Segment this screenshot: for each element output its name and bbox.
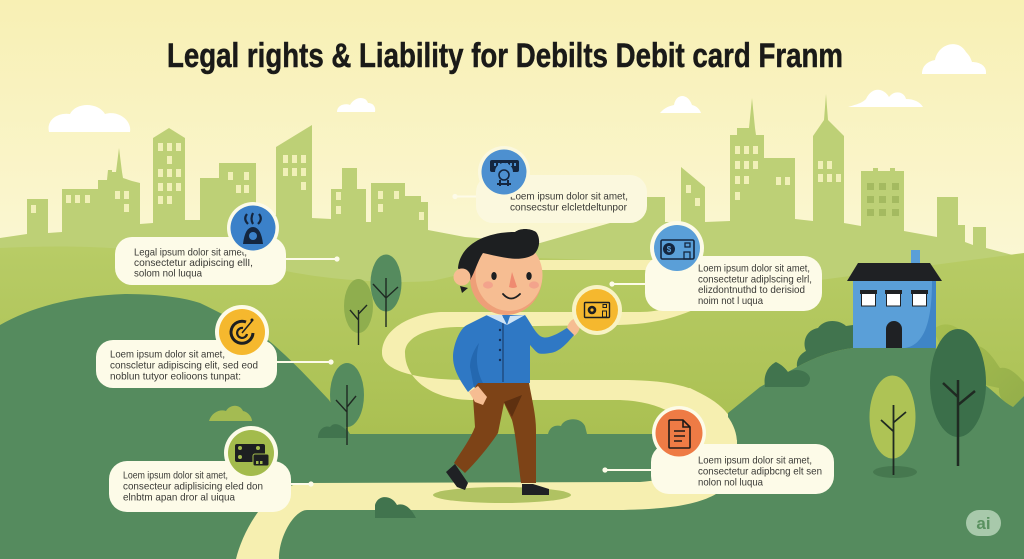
callout: keypad: Loem ipsum dolor sit amet, xyxy=(510,192,628,202)
cheeks xyxy=(483,281,539,289)
ground shadow xyxy=(433,487,571,503)
bush behind walker xyxy=(548,419,587,434)
ai watermark badge xyxy=(966,510,1001,536)
callout: legal ipsum: consectetur adipiscing ellI, xyxy=(134,258,253,269)
walking man xyxy=(433,229,580,503)
right hand xyxy=(567,319,580,336)
icon: banknote: $ xyxy=(667,245,672,254)
callout: banknote: consectetur adiplscing elrl, xyxy=(698,274,812,286)
left trees xyxy=(344,254,402,345)
nose xyxy=(509,272,517,288)
callout: target xyxy=(96,305,334,388)
collar xyxy=(486,315,525,325)
callout: document: consectetur adipbcng elt sen xyxy=(698,466,822,478)
tree: olive xyxy=(344,279,373,345)
ai watermark badge: ai xyxy=(976,514,991,533)
hair xyxy=(458,229,539,280)
callout: document xyxy=(602,406,834,494)
callout: card xyxy=(109,426,314,512)
left hand xyxy=(469,386,487,405)
eyes xyxy=(491,272,532,280)
icon: target xyxy=(215,305,269,359)
shoes xyxy=(446,464,549,495)
olive bushes on the right xyxy=(933,324,1024,407)
icon: banknote xyxy=(650,221,704,275)
callout: legal ipsum xyxy=(115,202,340,285)
skyline windows xyxy=(31,143,841,220)
winding path xyxy=(236,260,737,559)
bush on foreground xyxy=(375,497,416,518)
tree: big right xyxy=(930,329,986,466)
tree on left hill xyxy=(330,363,364,445)
callout: document: Loem ipsum dolor sit amet, xyxy=(698,456,812,466)
icon: card xyxy=(224,426,278,480)
callout: legal ipsum: solom nol luqua xyxy=(134,268,202,280)
head xyxy=(470,241,542,315)
left bush xyxy=(209,406,252,421)
icon: yellow banknote held by man xyxy=(572,285,622,335)
ear xyxy=(454,268,470,286)
bush lower xyxy=(765,362,810,387)
callout: target: consclеtur adipiscing elit, sed eod xyxy=(110,360,258,372)
callout: banknote: noim not l uqua xyxy=(698,296,763,307)
callout: banknote: elizdontnuthd to derisiod xyxy=(698,285,805,296)
dark windows xyxy=(867,183,899,216)
callout: target: noblun tutyor eolioons tunpat: xyxy=(110,372,241,382)
house bushes xyxy=(797,321,853,367)
right curve overlay xyxy=(650,388,737,450)
callout: document: nolon nol luqua xyxy=(698,478,763,488)
clouds xyxy=(49,44,986,132)
house xyxy=(847,250,942,348)
tree: dark xyxy=(370,254,402,327)
tree: small right xyxy=(870,376,917,478)
callout: banknote xyxy=(609,221,822,311)
mid green hills xyxy=(0,246,1024,450)
callout: card: Loem ipsum dolor sit amet, xyxy=(123,470,228,482)
callout: card: consecteur adiplisicing eled don xyxy=(123,482,263,492)
icon: blue lamp xyxy=(227,202,279,254)
callout: target: Loem ipsum dolor sit amet, xyxy=(110,350,225,360)
callout: keypad xyxy=(452,146,647,223)
title: Legal rights & Liability for Debilts Debit card Franm xyxy=(167,37,843,75)
path lower strip overlay xyxy=(236,440,737,559)
callout: card: elnbtm apan dror al uiqua xyxy=(123,492,235,504)
callout: legal ipsum: Legal ipsum dolor sit amet, xyxy=(134,248,247,258)
icon: document xyxy=(652,406,706,460)
smile xyxy=(503,294,520,298)
shirt xyxy=(453,315,574,392)
city skyline xyxy=(0,94,1024,300)
sky background xyxy=(0,0,1024,300)
dark green ground and hills xyxy=(0,294,1024,559)
callout: keypad: consecstur elcletdeltunpor xyxy=(510,202,628,214)
bush by tree xyxy=(318,424,346,438)
icon: terminal xyxy=(478,146,530,198)
callout: banknote: Loem ipsum dolor sit amet, xyxy=(698,264,810,274)
trousers xyxy=(454,383,536,483)
